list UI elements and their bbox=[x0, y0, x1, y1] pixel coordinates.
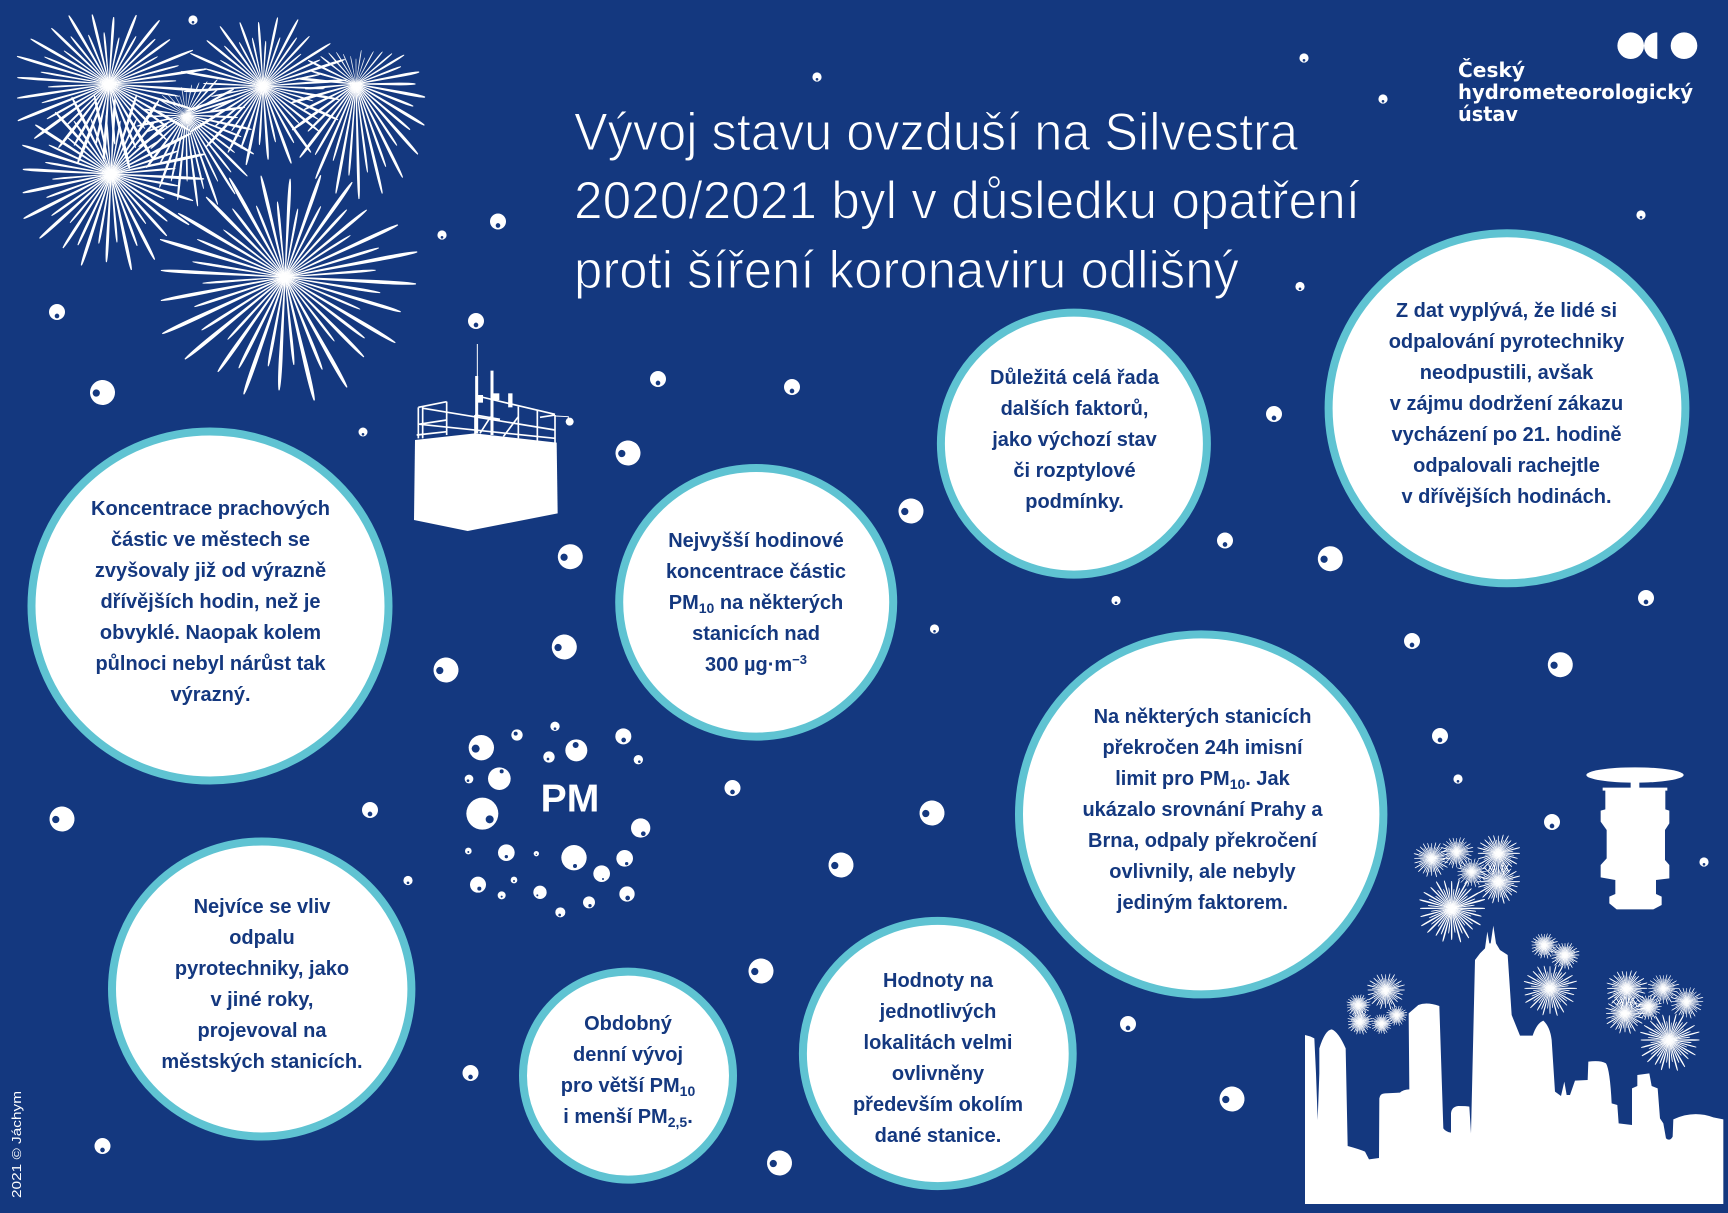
panel text: ovlivnily, ale nebyly bbox=[1109, 861, 1297, 883]
panel text: Koncentrace prachových bbox=[91, 498, 330, 520]
panel text: ukázalo srovnání Prahy a bbox=[1082, 799, 1323, 821]
panel text: na některých bbox=[714, 592, 843, 614]
panel text: v jiné roky, bbox=[210, 989, 314, 1011]
panel text: odpalu bbox=[229, 927, 295, 949]
panel text: dané stanice. bbox=[875, 1125, 1001, 1147]
skyline silhouette bbox=[1305, 926, 1723, 1204]
panel text: Na některých stanicích bbox=[1094, 706, 1311, 728]
panel text: částic ve městech se bbox=[111, 529, 310, 551]
panel: local surroundings bbox=[803, 921, 1073, 1186]
panel text: 10 bbox=[680, 1083, 695, 1099]
panel: highest hourly PM10 bbox=[619, 468, 893, 737]
panel text: denní vývoj bbox=[573, 1044, 683, 1066]
panel: similar daily course bbox=[523, 972, 733, 1180]
panel text: zvyšovaly již od výrazně bbox=[95, 560, 326, 582]
logo: Český hydrometeorologický ústav bbox=[1458, 32, 1697, 126]
small fireworks bbox=[1347, 835, 1703, 1071]
panel text: Nejvyšší hodinové bbox=[668, 530, 844, 552]
panel text: překročen 24h imisní bbox=[1102, 737, 1304, 759]
panel text: lokalitách velmi bbox=[864, 1032, 1012, 1054]
panel text: v zájmu dodržení zákazu bbox=[1390, 393, 1623, 415]
panel text: Obdobný bbox=[584, 1013, 673, 1035]
panel text: Nejvíce se vliv bbox=[194, 896, 331, 918]
panel text: odpalovali rachejtle bbox=[1413, 455, 1600, 477]
logo wordmark: Český bbox=[1458, 58, 1525, 82]
panel text: vycházení po 21. hodině bbox=[1391, 424, 1622, 446]
panel: urban stations influence bbox=[112, 842, 411, 1136]
panel text: odpalování pyrotechniky bbox=[1389, 331, 1625, 353]
panel text: pyrotechniky, jako bbox=[175, 958, 349, 980]
panel text: jako výchozí stav bbox=[991, 429, 1158, 451]
panel text: stanicích nad bbox=[692, 623, 820, 645]
panel text: i menší PM bbox=[563, 1106, 693, 1130]
logo mark bbox=[1617, 32, 1697, 59]
title: 2020/2021 byl v důsledku opatření bbox=[574, 172, 1360, 230]
panel text: . Jak bbox=[1245, 768, 1291, 790]
panel text: především okolím bbox=[853, 1094, 1023, 1116]
copyright note: 2021 © Jáchym bbox=[9, 1091, 24, 1198]
panel text: Z dat vyplývá, že lidé si bbox=[1396, 300, 1617, 322]
panel text: obvyklé. Naopak kolem bbox=[100, 622, 321, 644]
panel text: dalších faktorů, bbox=[1001, 398, 1148, 420]
panel: people kept fireworks earlier bbox=[1329, 233, 1685, 583]
panel text: městských stanicích. bbox=[161, 1051, 363, 1073]
fireworks top left bbox=[10, 7, 425, 406]
panel text: limit pro PM bbox=[1115, 768, 1291, 792]
panel: urban concentrations bbox=[32, 432, 388, 780]
panel text: 2,5 bbox=[668, 1114, 687, 1130]
panel: 24h limit exceeded bbox=[1019, 634, 1383, 994]
title: Vývoj stavu ovzduší na Silvestra bbox=[574, 103, 1298, 162]
panel text: jediným faktorem. bbox=[1116, 892, 1288, 914]
panel text: podmínky. bbox=[1025, 491, 1124, 513]
panel text: 10 bbox=[699, 600, 715, 616]
panel text: 300 µg·m bbox=[705, 652, 807, 676]
panel text: či rozptylové bbox=[1013, 460, 1136, 482]
panel text: Důležitá celá řada bbox=[990, 367, 1160, 389]
panel text: −3 bbox=[792, 652, 807, 667]
icon: measuring station on rooftop bbox=[414, 344, 574, 531]
icon: PM particle cluster bbox=[465, 722, 650, 917]
panel text: . bbox=[687, 1106, 693, 1128]
panel text: neodpustili, avšak bbox=[1420, 362, 1594, 384]
panel text: v dřívějších hodinách. bbox=[1401, 486, 1612, 508]
icon: air sampler head bbox=[1586, 767, 1684, 909]
panel text: ovlivněny bbox=[892, 1063, 985, 1085]
panel text: 10 bbox=[1230, 776, 1245, 792]
logo wordmark: hydrometeorologický bbox=[1458, 80, 1693, 104]
panel text: Brna, odpaly překročení bbox=[1088, 830, 1318, 852]
panel text: výrazný. bbox=[170, 684, 251, 706]
panel text: jednotlivých bbox=[879, 1001, 996, 1023]
railing and masts bbox=[417, 344, 568, 443]
PM label: PM bbox=[541, 777, 599, 821]
panel: other factors bbox=[941, 313, 1207, 575]
panel text: PM bbox=[669, 592, 843, 616]
panel text: Hodnoty na bbox=[883, 970, 994, 992]
station building bbox=[414, 433, 558, 531]
panel text: pro větší PM bbox=[561, 1075, 695, 1099]
logo wordmark: ústav bbox=[1458, 102, 1518, 126]
panel text: koncentrace částic bbox=[666, 561, 846, 583]
title: proti šíření koronaviru odlišný bbox=[574, 241, 1239, 300]
panel text: projevoval na bbox=[198, 1020, 327, 1042]
city skyline with fireworks bbox=[1305, 835, 1723, 1204]
panel text: dřívějších hodin, než je bbox=[100, 591, 321, 613]
panel text: půlnoci nebyl nárůst tak bbox=[95, 653, 326, 675]
